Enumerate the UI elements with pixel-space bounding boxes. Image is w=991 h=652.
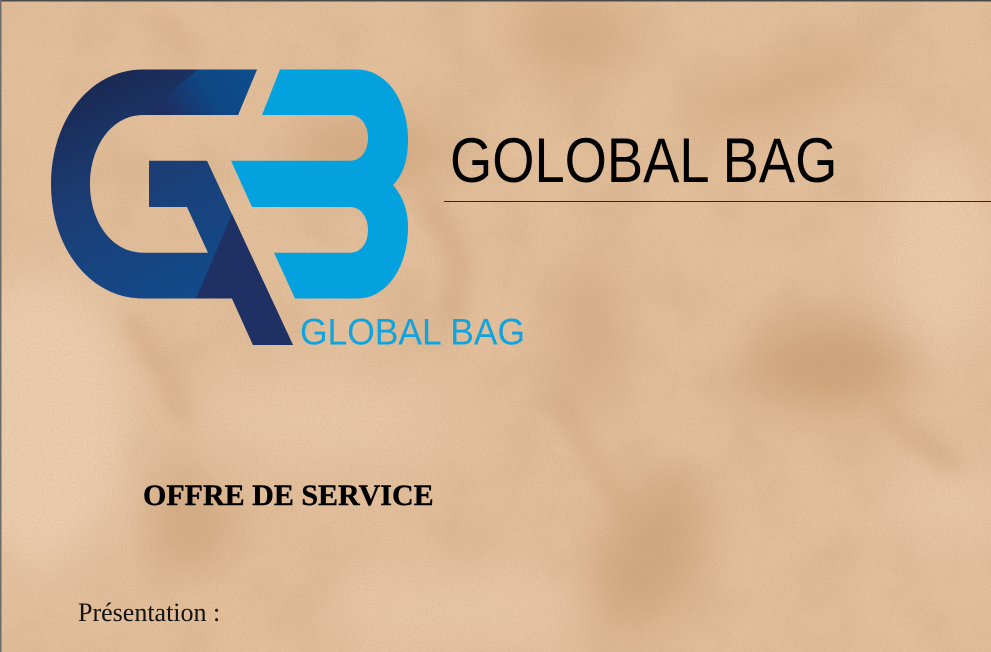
logo letter G — [51, 70, 293, 345]
heading: offre de service: OFFRE DE SERVICE — [143, 479, 434, 512]
title: GOLOBAL BAG — [450, 126, 837, 196]
logo wordmark: GLOBAL BAG — [300, 310, 525, 352]
logo letter B — [231, 70, 408, 298]
title underline — [444, 200, 991, 202]
text: présentation: Présentation : — [78, 598, 220, 627]
